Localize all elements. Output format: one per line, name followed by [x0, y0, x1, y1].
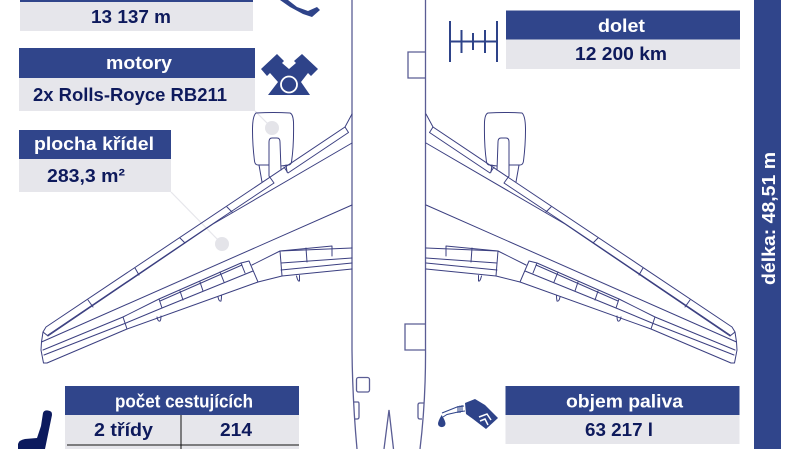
callout: engine leader [255, 111, 279, 135]
panel: range: 12 200 km [575, 43, 667, 64]
panel: range: dolet [598, 15, 645, 36]
icon: altitude [280, 0, 320, 17]
panel: passengers table: 2 třídy [94, 419, 154, 440]
icon: fuel nozzle [438, 399, 498, 429]
panel: length bar [754, 0, 781, 449]
callout: wing area leader [171, 192, 229, 251]
panel: fuel capacity: 63 217 l [585, 419, 653, 440]
panel: passengers table [65, 386, 299, 449]
left wing [41, 112, 352, 363]
icon: engine pistons [261, 54, 318, 95]
icon: range ruler [450, 21, 497, 62]
panel: passengers table: počet cestujících [115, 390, 253, 412]
panel: wing area: 283,3 m² [47, 165, 125, 186]
panel: maximum altitude [20, 0, 253, 31]
panel: engines: 2x Rolls-Royce RB211 [33, 84, 227, 105]
panel: length bar: délka: 48,51 m [758, 152, 779, 285]
panel: passengers table: 214 [220, 419, 253, 440]
panel: fuel capacity [506, 386, 740, 444]
left engine [269, 138, 281, 176]
panel: wing area: plocha křídel [34, 133, 154, 154]
panel: wing area [19, 130, 171, 192]
panel: engines: motory [106, 52, 173, 73]
icon: seat [18, 410, 52, 449]
fuselage [352, 0, 426, 449]
panel: engines [19, 48, 255, 111]
panel: range [506, 10, 740, 69]
right wing (mirror) [426, 112, 737, 363]
panel: maximum altitude: 13 137 m [91, 6, 171, 27]
panel: fuel capacity: objem paliva [566, 390, 684, 412]
